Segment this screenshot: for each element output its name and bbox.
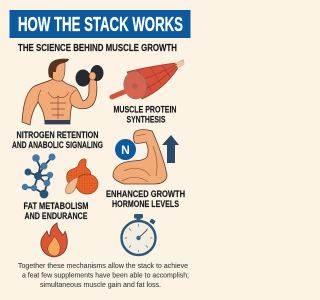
label: muscle protein synthesis [114,104,177,126]
label: fat metabolism: AND ENDURANCE [24,211,88,222]
icon: stopwatch [122,214,156,255]
icon: nitrogen badge [115,139,136,160]
icon: bodybuilder with dumbbell [22,59,104,125]
label: enhanced growth hormone levels: HORMONE LEVELS [112,199,179,210]
label: muscle protein synthesis: SYNTHESIS [126,114,166,126]
label: fat metabolism: FAT METABOLISM [24,201,89,212]
label: nitrogen retention: NITROGEN RETENTION [16,130,99,141]
icon: flame [41,223,67,257]
label: nitrogen retention [12,130,103,151]
body text: simultaneous muscle gain and fat loss. [40,280,161,289]
icon: molecule [22,154,56,198]
icon: flexed arm [113,130,167,184]
body text: Together these mechanisms allow the stack to achieve [18,261,188,270]
icon: fat cells [66,159,98,194]
icon: dumbbell [76,65,104,86]
label: muscle protein synthesis: MUSCLE PROTEIN [114,104,177,116]
icon: up arrow [162,135,179,163]
icon: muscle fibre bundle [112,60,184,101]
label: nitrogen retention: AND ANABOLIC SIGNALING [12,140,103,151]
body text: a feat few supplements have been able to accomplish; [22,270,189,280]
label: enhanced growth hormone levels [106,189,185,210]
label: fat metabolism [24,201,89,222]
body text [18,261,189,289]
icon: nitrogen badge: N [121,143,130,157]
